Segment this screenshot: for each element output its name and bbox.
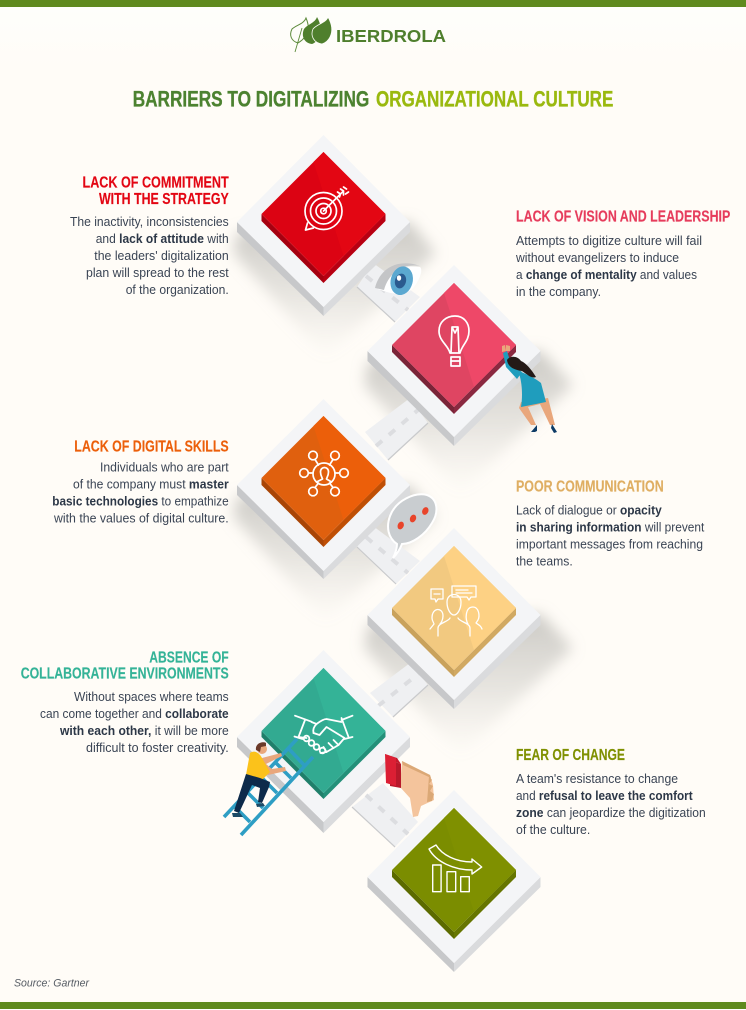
text block: poor communication: in sharing information will prevent	[516, 520, 705, 534]
icon: handshake	[294, 716, 352, 753]
text block: absence of collaborative environments: can come together and collaborate	[40, 706, 229, 721]
text block: absence of collaborative environments	[21, 649, 229, 755]
text block: lack of digital skills	[52, 438, 229, 525]
shadow: plate three	[233, 486, 436, 622]
text block: lack of digital skills: of the company must master	[73, 476, 229, 491]
icon: thumbs down	[385, 754, 434, 817]
source note: Source: Gartner	[14, 978, 90, 990]
text block: lack of digital skills: basic technologies to empathize	[52, 493, 229, 508]
text block: poor communication	[516, 478, 705, 568]
icon: speech bubble	[388, 494, 436, 558]
road: communication to collaboration	[370, 663, 428, 717]
text block: lack of commitment: of the organization.	[126, 282, 229, 297]
icon: team with speech bubbles	[430, 586, 482, 636]
text block: absence of collaborative environments: difficult to foster creativity.	[86, 740, 229, 755]
text block: fear of change: and refusal to leave the comfort	[516, 788, 693, 803]
icon: eye	[375, 263, 421, 298]
text block: lack of commitment: WITH THE STRATEGY	[99, 191, 229, 208]
text block: poor communication: the teams.	[516, 554, 573, 568]
text block: absence of collaborative environments: with each other, it will be more	[59, 723, 229, 738]
text block: fear of change: of the culture.	[516, 822, 590, 837]
text block: fear of change: A team's resistance to change	[516, 771, 678, 786]
panel: red diamond, commitment	[237, 135, 410, 316]
text block: lack of vision: a change of mentality and values	[516, 267, 697, 282]
text block: absence of collaborative environments: COLLABORATIVE ENVIRONMENTS	[21, 666, 229, 683]
title	[133, 87, 613, 112]
text block: poor communication: POOR COMMUNICATION	[516, 478, 664, 495]
title: ORGANIZATIONAL CULTURE	[376, 87, 613, 112]
shadow: plate one	[233, 222, 436, 358]
road: vision to digital skills	[365, 398, 428, 460]
icon: light bulb	[439, 316, 469, 366]
panel: orange diamond, digital skills	[237, 399, 410, 579]
text block: lack of commitment: LACK OF COMMITMENT	[82, 175, 229, 192]
text block: absence of collaborative environments: Without spaces where teams	[74, 689, 229, 704]
text block: lack of commitment: plan will spread to the rest	[86, 265, 229, 280]
road: commitment to vision	[357, 263, 420, 322]
logo: Iberdrola: IBERDROLA	[336, 26, 446, 46]
text block: absence of collaborative environments: ABSENCE OF	[149, 649, 229, 666]
text block: lack of vision	[515, 209, 730, 299]
icon: declining bar chart with arrow	[429, 845, 482, 892]
logo: Iberdrola	[291, 17, 446, 52]
text block: poor communication: Lack of dialogue or opacity	[516, 502, 662, 517]
title: BARRIERS TO DIGITALIZING	[133, 87, 369, 112]
text block: lack of digital skills: with the values of digital culture.	[53, 510, 229, 525]
panel: olive diamond, fear of change	[368, 790, 540, 972]
text block: lack of commitment: The inactivity, inconsistencies	[70, 214, 229, 229]
icon: woman pushing	[502, 345, 557, 433]
text block: fear of change: zone can jeopardize the digitization	[516, 805, 706, 820]
icon: target with arrow	[305, 187, 348, 230]
road: digital skills to communication	[357, 526, 420, 584]
text block: fear of change: FEAR OF CHANGE	[516, 747, 625, 764]
panel: sand diamond, communication	[368, 528, 540, 709]
text block: lack of digital skills: Individuals who are part	[100, 459, 229, 474]
text block: poor communication: important messages from reaching	[516, 536, 703, 552]
panel: teal diamond, collaboration	[237, 650, 410, 833]
text block: lack of commitment: the leaders' digitalization	[94, 248, 229, 263]
icon: people network	[300, 451, 348, 496]
text block: lack of vision: Attempts to digitize culture will fail	[516, 233, 702, 248]
text block: lack of vision: without evangelizers to induce	[515, 250, 679, 265]
text block: lack of vision: in the company.	[516, 284, 601, 299]
text block: lack of commitment: and lack of attitude with	[96, 231, 229, 246]
shadow: plate two	[364, 351, 573, 493]
text block: lack of digital skills: LACK OF DIGITAL SKILLS	[74, 438, 229, 455]
text block: fear of change	[516, 747, 706, 837]
icon: man climbing ladder	[224, 739, 313, 835]
text block: lack of commitment	[70, 175, 229, 297]
road: collaboration to fear of change	[352, 783, 418, 847]
panel: pink diamond, vision	[368, 265, 540, 446]
shadow: plate four	[364, 614, 573, 756]
